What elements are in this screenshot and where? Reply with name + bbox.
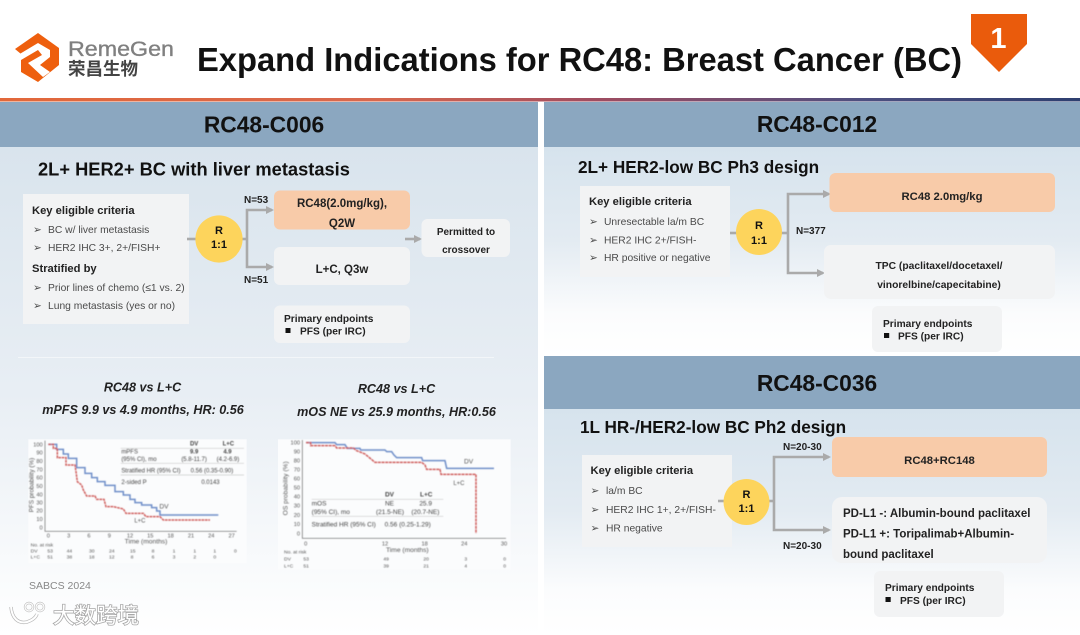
title: Expand Indications for RC48: Breast Cancer (BC) bbox=[197, 42, 962, 79]
chart: PFS Kaplan-Meier: DV bbox=[31, 549, 38, 555]
chart: OS Kaplan-Meier: 49 bbox=[383, 557, 389, 563]
chart: OS Kaplan-Meier: 20 bbox=[423, 557, 429, 563]
header logo: RemeGen: 荣昌生物 bbox=[68, 56, 138, 81]
chart: OS Kaplan-Meier: 53 bbox=[303, 557, 309, 563]
arm: PD-L1 stratified: PD-L1 +: Toripalimab+Albumin- bbox=[843, 528, 1014, 540]
crossover box: Permitted to bbox=[437, 227, 495, 238]
chart: PFS Kaplan-Meier: 80 bbox=[36, 459, 43, 465]
chart: OS Kaplan-Meier: OS probability (%) bbox=[282, 461, 289, 515]
chart: OS Kaplan-Meier: (95% CI), mo bbox=[312, 509, 350, 516]
arm: RC48 2.0mg/kg: RC48 2.0mg/kg bbox=[902, 191, 983, 203]
chart: OS Kaplan-Meier: 30 bbox=[501, 541, 507, 547]
chart: OS Kaplan-Meier: 0 bbox=[297, 531, 300, 537]
randomisation circle: C036: 1:1 bbox=[739, 503, 754, 515]
PFS result text bbox=[42, 380, 245, 417]
randomisation circle: C012: 1:1 bbox=[751, 235, 767, 247]
chart: PFS Kaplan-Meier: DV bbox=[159, 504, 169, 511]
arm: RC48: RC48(2.0mg/kg), bbox=[297, 198, 387, 210]
primary endpoints: C012 bbox=[872, 306, 1002, 352]
chart: PFS Kaplan-Meier: Time (months) bbox=[125, 538, 167, 545]
chart: PFS Kaplan-Meier: (95% CI), mo bbox=[121, 457, 157, 463]
sample sizes: C006: N=53 bbox=[244, 195, 269, 206]
chart: OS Kaplan-Meier: 21 bbox=[423, 564, 429, 570]
chart: OS Kaplan-Meier: 70 bbox=[294, 468, 300, 474]
chart: PFS Kaplan-Meier: 51 bbox=[47, 555, 53, 561]
chart: OS Kaplan-Meier: 0.56 (0.25-1.29) bbox=[385, 521, 431, 528]
chart: PFS Kaplan-Meier: (4.2-6.9) bbox=[217, 457, 239, 463]
chart: PFS Kaplan-Meier: 3 bbox=[67, 533, 70, 539]
subheading: C012: 2L+ HER2-low BC Ph3 design bbox=[578, 157, 819, 177]
primary endpoints: C006: Primary endpoints bbox=[284, 314, 374, 325]
arm: L+C bbox=[274, 247, 410, 285]
primary endpoints: C012: PFS (per IRC) bbox=[898, 332, 964, 342]
chart: PFS Kaplan-Meier: 0.0143 bbox=[201, 480, 220, 486]
header logo: RemeGen bbox=[15, 33, 174, 82]
chart: PFS Kaplan-Meier: 38 bbox=[67, 555, 72, 561]
chart: PFS Kaplan-Meier: 30 bbox=[36, 500, 43, 506]
chart: PFS Kaplan-Meier: 53 bbox=[47, 549, 53, 555]
chart: PFS Kaplan-Meier: 1 bbox=[213, 549, 216, 555]
OS result text bbox=[297, 382, 497, 419]
chart: PFS Kaplan-Meier: 50 bbox=[36, 484, 43, 490]
criteria box: C036: ➢ bbox=[590, 524, 599, 534]
criteria box: C006: ➢ bbox=[33, 225, 42, 236]
chart: OS Kaplan-Meier: (21.5-NE) bbox=[376, 509, 404, 516]
chart: PFS Kaplan-Meier: L+C bbox=[134, 518, 146, 524]
chart: PFS Kaplan-Meier: 0 bbox=[234, 549, 237, 555]
chart: PFS Kaplan-Meier: DV bbox=[190, 442, 198, 448]
criteria box: C006: ➢ bbox=[33, 243, 42, 254]
chart: PFS Kaplan-Meier: 10 bbox=[36, 517, 43, 523]
chart: PFS Kaplan-Meier: 15 bbox=[130, 549, 136, 555]
chart: OS Kaplan-Meier: 4 bbox=[464, 564, 467, 570]
chart: PFS Kaplan-Meier: 30 bbox=[89, 549, 95, 555]
chart: PFS Kaplan-Meier: 4.9 bbox=[223, 449, 232, 455]
chart: PFS Kaplan-Meier: 9.9 bbox=[190, 449, 199, 455]
chart: OS Kaplan-Meier: DV bbox=[464, 458, 474, 465]
criteria box: C012: ➢ bbox=[589, 236, 598, 246]
chart: OS Kaplan-Meier: 0 bbox=[503, 564, 506, 570]
panel: RC48-C006 bbox=[0, 102, 538, 635]
arm: RC48+RC148: RC48+RC148 bbox=[904, 455, 975, 467]
criteria box: C006: Stratified by bbox=[32, 263, 97, 275]
chart: PFS Kaplan-Meier: 70 bbox=[36, 467, 43, 473]
arm: L+C: L+C, Q3w bbox=[316, 264, 368, 276]
randomisation circle: C006 bbox=[195, 215, 243, 263]
chart: PFS Kaplan-Meier: (5.8-11.7) bbox=[181, 457, 207, 463]
chart: OS Kaplan-Meier: 39 bbox=[383, 564, 389, 570]
chart: OS Kaplan-Meier: 60 bbox=[294, 477, 300, 483]
chart: PFS Kaplan-Meier: 6 bbox=[87, 533, 91, 539]
chart: OS Kaplan-Meier: L+C bbox=[453, 481, 465, 487]
subheading: C006: 2L+ HER2+ BC with liver metastasis bbox=[38, 158, 350, 180]
heading: RC48-C012: RC48-C012 bbox=[757, 111, 877, 137]
criteria box: C012: HER2 IHC 2+/FISH- bbox=[604, 236, 696, 246]
randomisation circle: C012 bbox=[736, 209, 782, 255]
chart: OS Kaplan-Meier: DV bbox=[284, 557, 292, 563]
chart: OS Kaplan-Meier: 50 bbox=[294, 486, 300, 492]
crossover box bbox=[422, 219, 510, 257]
chart: PFS Kaplan-Meier: 0 bbox=[213, 555, 216, 561]
criteria box: C012: ➢ bbox=[589, 253, 598, 264]
chart: PFS Kaplan-Meier: 27 bbox=[228, 533, 235, 539]
header logo: RemeGen: RemeGen bbox=[68, 38, 174, 61]
chart: PFS Kaplan-Meier: 21 bbox=[188, 533, 194, 539]
chart: PFS Kaplan-Meier: 1 bbox=[173, 549, 176, 555]
randomisation circle: C006: 1:1 bbox=[211, 239, 227, 251]
page number badge bbox=[971, 14, 1027, 72]
chart: PFS Kaplan-Meier: 1 bbox=[193, 549, 196, 555]
criteria box: C012 bbox=[580, 186, 730, 277]
criteria box: C036: ➢ bbox=[590, 505, 599, 516]
chart: PFS Kaplan-Meier: L+C bbox=[223, 442, 235, 448]
chart: OS Kaplan-Meier: 24 bbox=[461, 541, 467, 547]
watermark: 大数跨境 bbox=[53, 599, 139, 630]
arm: TPC: vinorelbine/capecitabine) bbox=[877, 280, 1001, 291]
sample sizes: C006 bbox=[244, 195, 269, 286]
arm: RC48 2.0mg/kg bbox=[830, 173, 1055, 212]
randomisation arrows: C036 bbox=[718, 457, 829, 530]
arm: RC48 bbox=[274, 190, 410, 230]
chart: PFS Kaplan-Meier: Stratified HR (95% CI) bbox=[121, 469, 181, 475]
primary endpoints: C012: Primary endpoints bbox=[883, 319, 973, 330]
criteria box: C006: BC w/ liver metastasis bbox=[48, 225, 149, 236]
criteria box: C012: Unresectable la/m BC bbox=[604, 217, 705, 228]
criteria box: C036: ➢ bbox=[590, 486, 599, 497]
primary endpoints: C006: PFS (per IRC) bbox=[300, 326, 366, 338]
criteria box: C006: ➢ bbox=[33, 283, 42, 294]
criteria box: C012: HR positive or negative bbox=[604, 253, 711, 264]
criteria box: C006: Key eligible criteria bbox=[32, 205, 135, 217]
chart: OS Kaplan-Meier: No. at risk bbox=[284, 550, 307, 556]
randomisation arrows: C006 bbox=[187, 210, 420, 267]
chart: PFS Kaplan-Meier: 100 bbox=[33, 442, 43, 448]
sample sizes: C036: N=20-30 bbox=[783, 442, 822, 453]
criteria box: C036: la/m BC bbox=[606, 486, 643, 497]
arm: PD-L1 stratified: bound paclitaxel bbox=[843, 549, 934, 561]
chart: OS Kaplan-Meier: DV bbox=[385, 492, 395, 499]
chart: PFS Kaplan-Meier: 18 bbox=[89, 555, 95, 561]
chart: PFS Kaplan-Meier: 20 bbox=[36, 509, 43, 515]
chart: PFS Kaplan-Meier: 0 bbox=[40, 525, 43, 531]
chart: OS Kaplan-Meier: NE bbox=[385, 501, 395, 508]
chart: OS Kaplan-Meier: 12 bbox=[382, 541, 388, 547]
arm: TPC: TPC (paclitaxel/docetaxel/ bbox=[875, 261, 1003, 272]
chart: OS Kaplan-Meier: 100 bbox=[291, 441, 300, 447]
chart: PFS Kaplan-Meier: 8 bbox=[131, 555, 134, 561]
chart: OS Kaplan-Meier: 20 bbox=[294, 513, 300, 519]
chart: PFS Kaplan-Meier: mPFS bbox=[121, 449, 138, 455]
chart: PFS Kaplan-Meier: 60 bbox=[36, 476, 43, 482]
criteria box: C006: Lung metastasis (yes or no) bbox=[48, 301, 175, 312]
chart: PFS Kaplan-Meier: 12 bbox=[127, 533, 133, 539]
criteria box: C006: HER2 IHC 3+, 2+/FISH+ bbox=[48, 243, 160, 254]
chart: PFS Kaplan-Meier: 90 bbox=[36, 451, 43, 457]
OS result text: mOS NE vs 25.9 months, HR:0.56 bbox=[297, 405, 497, 419]
chart: PFS Kaplan-Meier: 15 bbox=[147, 533, 153, 539]
chart: PFS Kaplan-Meier: 0.56 (0.35-0.90) bbox=[191, 469, 233, 475]
chart: OS Kaplan-Meier: 3 bbox=[464, 557, 467, 563]
PFS result text: RC48 vs L+C bbox=[104, 380, 182, 394]
chart: OS Kaplan-Meier: 30 bbox=[294, 504, 300, 510]
chart: PFS Kaplan-Meier: 12 bbox=[109, 555, 115, 561]
chart: OS Kaplan-Meier: 10 bbox=[294, 522, 300, 528]
chart: OS Kaplan-Meier: L+C bbox=[284, 564, 294, 570]
chart: PFS Kaplan-Meier: PFS probability (%) bbox=[28, 458, 35, 512]
randomisation circle: C036 bbox=[724, 479, 770, 525]
chart: PFS Kaplan-Meier: 0 bbox=[47, 533, 50, 539]
crossover box: crossover bbox=[442, 245, 490, 256]
chart: OS Kaplan-Meier: Stratified HR (95% CI) bbox=[312, 521, 376, 528]
chart: PFS Kaplan-Meier: 18 bbox=[168, 533, 174, 539]
randomisation circle: C036: R bbox=[743, 489, 751, 501]
chart: OS Kaplan-Meier: 18 bbox=[422, 541, 428, 547]
chart: PFS Kaplan-Meier: 24 bbox=[109, 549, 115, 555]
arm: PD-L1 stratified bbox=[832, 497, 1047, 563]
criteria box: C006 bbox=[23, 194, 189, 324]
chart: OS Kaplan-Meier: Time (months) bbox=[386, 547, 429, 554]
heading: RC48-C036: RC48-C036 bbox=[757, 370, 877, 396]
randomisation circle: C012: R bbox=[755, 220, 763, 232]
criteria box: C036: Key eligible criteria bbox=[590, 465, 694, 477]
criteria box: C036: HER2 IHC 1+, 2+/FISH- bbox=[606, 505, 716, 516]
chart: PFS Kaplan-Meier: 2 bbox=[193, 555, 196, 561]
sample sizes: C036: N=20-30 bbox=[783, 541, 822, 552]
primary endpoints: C036: Primary endpoints bbox=[885, 583, 975, 594]
chart: OS Kaplan-Meier: 0 bbox=[503, 557, 506, 563]
chart: OS Kaplan-Meier: 51 bbox=[303, 564, 309, 570]
primary endpoints: C036: PFS (per IRC) bbox=[900, 596, 966, 607]
chart: OS Kaplan-Meier: 0 bbox=[304, 541, 307, 547]
chart: OS Kaplan-Meier: 40 bbox=[294, 495, 300, 501]
chart: PFS Kaplan-Meier: 2-sided P bbox=[121, 480, 147, 486]
arm: RC48: Q2W bbox=[329, 218, 355, 230]
chart: PFS Kaplan-Meier: 24 bbox=[208, 533, 214, 539]
arm: TPC bbox=[824, 245, 1055, 299]
chart: OS Kaplan-Meier: L+C bbox=[420, 492, 433, 499]
sample sizes: C006: N=51 bbox=[244, 275, 269, 286]
chart: OS Kaplan-Meier bbox=[278, 439, 511, 570]
criteria box: C036 bbox=[582, 455, 732, 547]
OS result text: RC48 vs L+C bbox=[358, 382, 436, 396]
source note: SABCS 2024 bbox=[29, 580, 91, 592]
arm: PD-L1 stratified: PD-L1 -: Albumin-bound paclitaxel bbox=[843, 508, 1030, 520]
primary endpoints: C036 bbox=[874, 571, 1004, 617]
criteria box: C006: Prior lines of chemo (≤1 vs. 2) bbox=[48, 283, 185, 294]
chart: PFS Kaplan-Meier: 8 bbox=[152, 549, 155, 555]
criteria box: C036: HR negative bbox=[606, 524, 663, 534]
chart: PFS Kaplan-Meier: 40 bbox=[36, 492, 43, 498]
criteria box: C012: ➢ bbox=[589, 217, 598, 228]
subheading: C036: 1L HR-/HER2-low BC Ph2 design bbox=[580, 417, 846, 437]
chart: OS Kaplan-Meier: 80 bbox=[294, 459, 300, 465]
heading: RC48-C006: RC48-C006 bbox=[204, 112, 324, 138]
watermark bbox=[11, 599, 139, 630]
chart: PFS Kaplan-Meier: No. at risk bbox=[31, 542, 54, 548]
panel: RC48-C036 bbox=[544, 356, 1080, 635]
chart: PFS Kaplan-Meier: 3 bbox=[173, 555, 176, 561]
page number badge: 1 bbox=[990, 23, 1007, 55]
chart: PFS Kaplan-Meier bbox=[28, 439, 247, 563]
chart: OS Kaplan-Meier: 25.9 bbox=[419, 501, 432, 508]
chart: OS Kaplan-Meier: mOS bbox=[312, 501, 327, 508]
PFS result text: mPFS 9.9 vs 4.9 months, HR: 0.56 bbox=[42, 403, 245, 417]
randomisation circle: C006: R bbox=[215, 225, 223, 237]
arm: RC48+RC148 bbox=[832, 437, 1047, 477]
chart: PFS Kaplan-Meier: 9 bbox=[108, 533, 111, 539]
chart: PFS Kaplan-Meier: L+C bbox=[31, 555, 40, 561]
chart: OS Kaplan-Meier: (20.7-NE) bbox=[411, 509, 439, 516]
sample sizes: C036 bbox=[783, 442, 822, 552]
chart: PFS Kaplan-Meier: 6 bbox=[152, 555, 155, 561]
criteria box: C006: ➢ bbox=[33, 301, 42, 312]
panel: RC48-C012 bbox=[544, 102, 1080, 356]
sample size: C012: N=377 bbox=[796, 226, 826, 237]
chart: OS Kaplan-Meier: 90 bbox=[294, 450, 300, 456]
randomisation arrows: C012 bbox=[730, 194, 829, 273]
chart: PFS Kaplan-Meier: 44 bbox=[67, 549, 72, 555]
primary endpoints: C006 bbox=[274, 306, 410, 343]
criteria box: C012: Key eligible criteria bbox=[589, 196, 692, 208]
